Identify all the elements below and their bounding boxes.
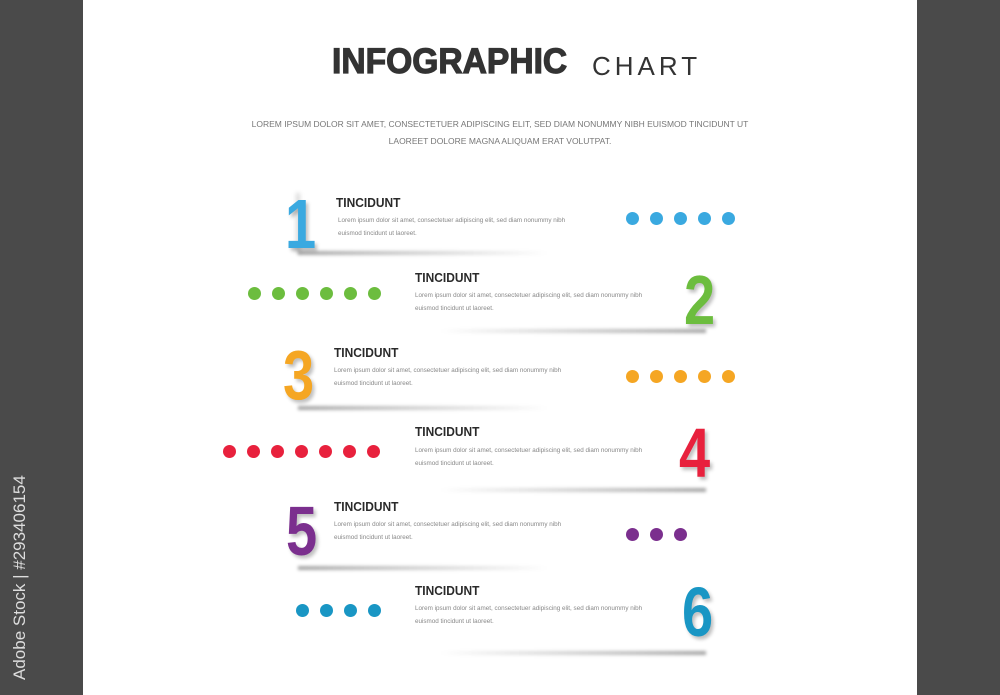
heading 4: TINCIDUNT bbox=[415, 424, 479, 439]
heading 6: TINCIDUNT bbox=[415, 583, 479, 598]
dots 2 bbox=[248, 287, 381, 300]
row 3 bbox=[283, 336, 735, 414]
row 6 bbox=[296, 573, 716, 657]
right side bar bbox=[917, 0, 1000, 695]
dots 1 bbox=[626, 212, 735, 225]
text 5: Lorem ipsum dolor sit amet, consectetuer adipiscing elit, sed diam nonummy nibh euismod tincidunt ut laoreet. bbox=[334, 521, 561, 541]
dots 3 bbox=[626, 370, 735, 383]
subtitle: LOREM IPSUM DOLOR SIT AMET, CONSECTETUER ADIPISCING ELIT, SED DIAM NONUMMY NIBH EUISMOD TINCIDUNT UT bbox=[252, 119, 748, 129]
title: CHART bbox=[592, 51, 701, 81]
row 5 bbox=[286, 492, 687, 572]
subtitle bbox=[252, 119, 748, 146]
title bbox=[332, 42, 701, 81]
number 3: 3 bbox=[283, 336, 314, 414]
number 2: 2 bbox=[684, 261, 715, 339]
number 4: 4 bbox=[679, 414, 710, 492]
row 2 bbox=[248, 261, 717, 339]
left side bar bbox=[0, 0, 83, 695]
title: INFOGRAPHIC bbox=[332, 42, 567, 81]
number 1: 1 bbox=[285, 185, 316, 263]
number 6: 6 bbox=[682, 573, 713, 651]
row 4 bbox=[223, 414, 714, 494]
dots 4 bbox=[223, 445, 380, 458]
watermark id vertical: Adobe Stock | #293406154 bbox=[10, 475, 29, 680]
text 3: Lorem ipsum dolor sit amet, consectetuer adipiscing elit, sed diam nonummy nibh euismod tincidunt ut laoreet. bbox=[334, 367, 561, 387]
heading 1: TINCIDUNT bbox=[336, 195, 400, 210]
heading 2: TINCIDUNT bbox=[415, 270, 479, 285]
row 1 bbox=[285, 185, 735, 263]
text 2: Lorem ipsum dolor sit amet, consectetuer adipiscing elit, sed diam nonummy nibh euismod tincidunt ut laoreet. bbox=[415, 292, 642, 312]
text 4: Lorem ipsum dolor sit amet, consectetuer adipiscing elit, sed diam nonummy nibh euismod tincidunt ut laoreet. bbox=[415, 447, 642, 467]
subtitle: LAOREET DOLORE MAGNA ALIQUAM ERAT VOLUTPAT. bbox=[389, 136, 611, 146]
dots 5 bbox=[626, 528, 687, 541]
heading 3: TINCIDUNT bbox=[334, 345, 398, 360]
heading 5: TINCIDUNT bbox=[334, 499, 398, 514]
text 6: Lorem ipsum dolor sit amet, consectetuer adipiscing elit, sed diam nonummy nibh euismod tincidunt ut laoreet. bbox=[415, 605, 642, 625]
text 1: Lorem ipsum dolor sit amet, consectetuer adipiscing elit, sed diam nonummy nibh euismod tincidunt ut laoreet. bbox=[338, 217, 565, 237]
dots 6 bbox=[296, 604, 381, 617]
number 5: 5 bbox=[286, 492, 317, 570]
